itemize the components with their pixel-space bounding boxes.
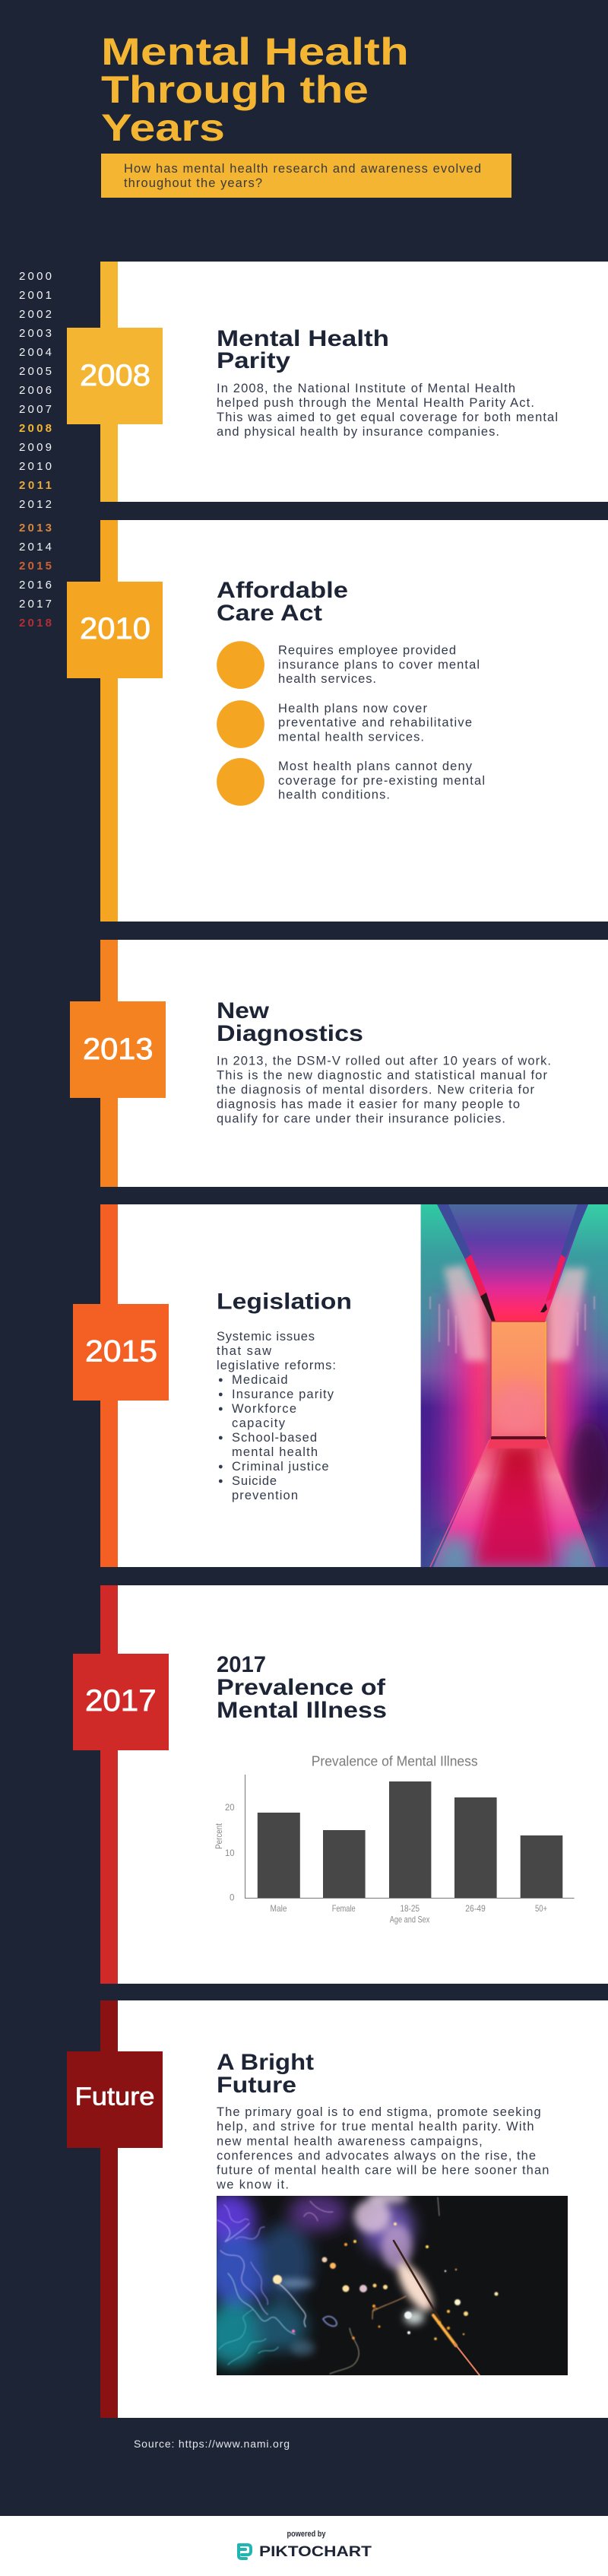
text: point 3: coverage for pre-existing mental	[278, 774, 485, 788]
chart title: Prevalence of Mental Illness	[312, 1753, 478, 1769]
heading: New Diagnostics	[217, 998, 363, 1046]
year badge: 2017: 2017	[85, 1684, 157, 1718]
timeline year list	[19, 270, 52, 630]
timeline year list: 2012	[19, 498, 52, 511]
smoke wisps	[217, 2197, 439, 2374]
heading: Legislation: Legislation	[217, 1290, 352, 1314]
axis labels: 18-25	[400, 1903, 420, 1914]
text: systemic issues list: prevention	[232, 1489, 298, 1502]
timeline year list: 2003	[19, 327, 52, 340]
text: future description	[216, 2105, 549, 2191]
corner beams	[437, 1204, 471, 1259]
text: systemic issues list: capacity	[232, 1416, 286, 1430]
heading: Affordable Care Act	[217, 578, 348, 626]
heading: A Bright Future: A Bright	[217, 2050, 314, 2075]
footer: powered by Piktochart: powered by	[287, 2530, 326, 2539]
year badge: 2015	[73, 1304, 169, 1401]
sparkler stick	[394, 2241, 480, 2375]
text: future description: future of mental health care will be here sooner than	[217, 2163, 549, 2177]
heading: Affordable Care Act: Affordable	[217, 578, 348, 603]
heading: A Bright Future: Future	[217, 2073, 296, 2098]
text: DSM-V description: the diagnosis of mental disorders. New criteria for	[217, 1083, 535, 1097]
axis labels: 26-49	[465, 1903, 486, 1914]
text: parity description: and physical health by insurance companies.	[217, 425, 499, 439]
heading: Mental Health Parity: Parity	[217, 348, 290, 373]
text: DSM-V description: This is the new diagnostic and statistical manual for	[217, 1069, 547, 1083]
year badge: 2008: 2008	[80, 359, 150, 392]
heading: Affordable Care Act: Care Act	[217, 601, 322, 626]
title: Mental Health	[101, 30, 409, 73]
axis labels: Age and Sex	[390, 1915, 429, 1925]
text: point 2: mental health services.	[278, 731, 424, 744]
sparks	[273, 2222, 499, 2340]
title: Years	[101, 106, 225, 149]
text: systemic issues list: Workforce	[232, 1402, 296, 1416]
timeline year list: 2007	[19, 403, 52, 416]
text: point 2: Health plans now cover	[278, 702, 427, 715]
panel: 2013 New Diagnostics	[70, 940, 608, 1187]
year badge: 2017	[73, 1654, 169, 1750]
panel: 2015 Legislation	[73, 1204, 608, 1580]
text: systemic issues list	[217, 1330, 336, 1502]
text: future description: we know it.	[216, 2178, 289, 2191]
timeline year list: 2015	[19, 560, 52, 573]
text: point 3: Most health plans cannot deny	[278, 760, 473, 773]
heading: 2017 Prevalence of Mental Illness: Mental Illness	[217, 1698, 387, 1723]
year badge: Future: Future	[74, 2082, 155, 2111]
text: point 3: health conditions.	[278, 788, 390, 802]
timeline year list: 2002	[19, 308, 52, 321]
heading: New Diagnostics: New	[217, 998, 270, 1023]
text: point 1: insurance plans to cover mental	[278, 658, 480, 671]
year badge: 2013: 2013	[83, 1033, 154, 1066]
heading: Mental Health Parity	[217, 326, 389, 373]
axis labels: 20	[225, 1802, 235, 1813]
text: DSM-V description: diagnosis has made it easier for many people to	[217, 1098, 520, 1112]
text: systemic issues list: Medicaid	[232, 1373, 288, 1387]
year badge: 2010: 2010	[80, 612, 150, 646]
axis labels: Male	[271, 1903, 287, 1914]
text: parity description: This was aimed to get equal coverage for both mental	[217, 411, 558, 424]
subtitle banner: throughout the years?	[124, 176, 262, 190]
timeline year list: 2004	[19, 346, 52, 359]
text: future description: The primary goal is to end stigma, promote seeking	[217, 2105, 541, 2119]
text: parity description: helped push through the Mental Health Parity Act.	[217, 396, 534, 410]
text: point 2	[278, 702, 472, 744]
timeline year list: 2000	[19, 270, 52, 283]
timeline year list: 2006	[19, 384, 52, 397]
heading: 2017 Prevalence of Mental Illness	[217, 1652, 387, 1723]
text: point 1: Requires employee provided	[278, 644, 456, 658]
text: systemic issues list: Systemic issues	[217, 1330, 315, 1344]
timeline year list: 2009	[19, 441, 52, 454]
text: systemic issues list: mental health	[232, 1445, 318, 1459]
panel: 2008 Mental Health Parity	[67, 262, 608, 502]
timeline year list: 2014	[19, 541, 52, 554]
text: systemic issues list: that saw	[217, 1344, 271, 1358]
text: future description: conferences and advocates always on the rise, the	[217, 2149, 536, 2163]
timeline year list: 2013	[19, 522, 52, 535]
text: systemic issues list: Suicide	[232, 1474, 277, 1488]
heading: 2017 Prevalence of Mental Illness: 2017	[217, 1652, 266, 1677]
text: point 1	[278, 644, 480, 686]
heading: Mental Health Parity: Mental Health	[217, 326, 389, 351]
text: future description: new mental health awareness campaigns,	[217, 2134, 483, 2148]
bars	[258, 1781, 562, 1898]
source line: Source: https://www.nami.org	[134, 2438, 290, 2450]
image: sparkler	[204, 2191, 568, 2375]
text: parity description: In 2008, the National Institute of Mental Health	[217, 382, 515, 395]
panel: 2017 Prevalence	[73, 1585, 608, 1984]
text: future description: help, and strive for true mental health parity. With	[217, 2120, 534, 2133]
panel: A Bright Future	[67, 2000, 608, 2418]
timeline year list: 2008	[19, 422, 52, 435]
image: neon corridor	[420, 1204, 608, 1580]
year badge: 2010	[67, 582, 163, 678]
heading: New Diagnostics: Diagnostics	[217, 1021, 363, 1046]
timeline year list: 2001	[19, 289, 52, 302]
text: parity description	[217, 382, 558, 439]
floor corners	[439, 1537, 470, 1580]
text: DSM-V description	[217, 1055, 551, 1126]
axis labels: 10	[225, 1848, 235, 1858]
heading: 2017 Prevalence of Mental Illness: Prevalence of	[217, 1675, 386, 1700]
text: systemic issues list: Criminal justice	[232, 1460, 329, 1474]
text: DSM-V description: In 2013, the DSM-V rolled out after 10 years of work.	[217, 1055, 551, 1068]
text: point 2: preventative and rehabilitative	[278, 716, 472, 730]
axis labels	[214, 1802, 547, 1925]
icon: circle 3	[217, 758, 264, 806]
highlights on walls	[444, 1265, 587, 1361]
heading: A Bright Future	[217, 2050, 314, 2098]
text: systemic issues list: legislative reforms:	[217, 1359, 336, 1372]
text: systemic issues list: School-based	[232, 1431, 317, 1445]
year badge: 2013	[70, 1001, 166, 1098]
text: point 3	[278, 760, 485, 802]
icon: Piktochart logo	[239, 2545, 251, 2559]
subtitle banner: How has mental health research and awareness evolved	[124, 162, 481, 176]
bar chart	[214, 1753, 575, 1925]
timeline year list: 2018	[19, 617, 52, 630]
text: systemic issues list: Insurance parity	[232, 1388, 334, 1401]
subtitle banner	[101, 154, 511, 198]
axis labels: 0	[230, 1892, 235, 1903]
timeline year list: 2017	[19, 598, 52, 611]
timeline year list: 2011	[19, 479, 52, 492]
axis labels: 50+	[535, 1903, 547, 1914]
title	[101, 30, 409, 149]
icon: circle 2	[217, 700, 264, 748]
icon: circle 1	[217, 641, 264, 689]
text: point 1: health services.	[278, 672, 376, 686]
title: Through the	[101, 68, 369, 111]
footer: powered by Piktochart: PIKTOCHART	[259, 2544, 372, 2560]
timeline year list: 2005	[19, 365, 52, 378]
year badge: 2015: 2015	[85, 1335, 157, 1369]
footer: powered by Piktochart	[0, 2516, 608, 2576]
year badge: 2008	[67, 328, 163, 424]
axis labels: Percent	[214, 1823, 224, 1849]
timeline year list: 2016	[19, 579, 52, 592]
axis labels: Female	[332, 1903, 356, 1914]
panel: 2010 Affordable Care Act	[67, 520, 608, 922]
year badge: Future	[67, 2051, 163, 2148]
timeline year list: 2010	[19, 460, 52, 473]
text: DSM-V description: qualify for care under their insurance policies.	[217, 1112, 505, 1126]
